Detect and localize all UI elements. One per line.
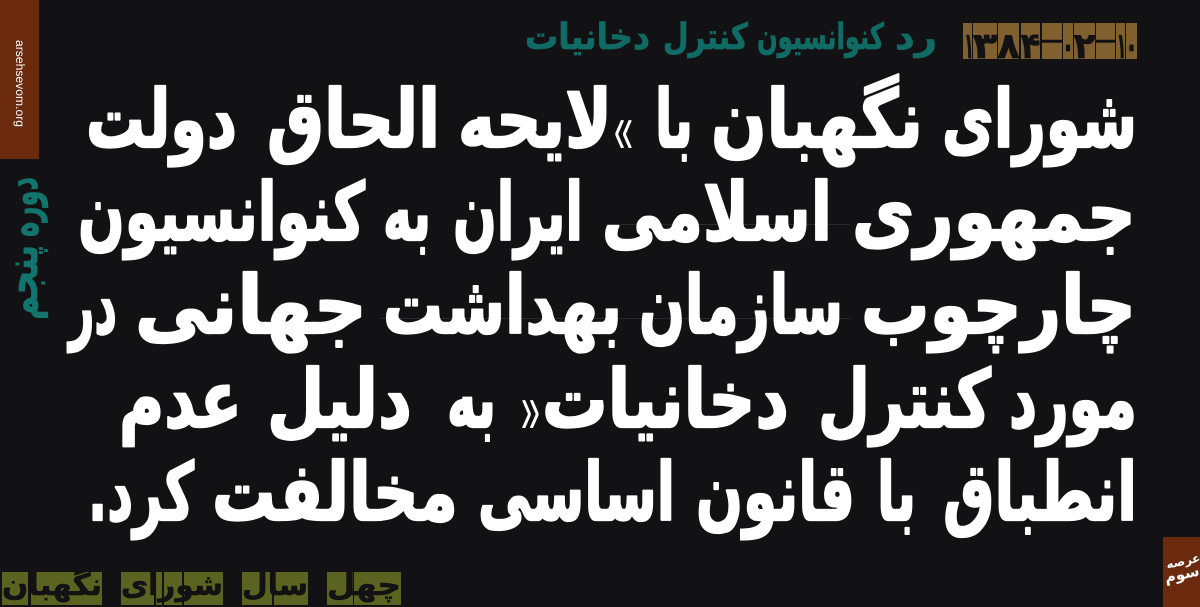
- line 1: با: [655, 73, 693, 166]
- line 2: [78, 166, 1136, 260]
- line 3: سازمان: [639, 259, 843, 353]
- line 2: ایران: [453, 166, 583, 260]
- series title: forty years of the Guardian Council: چهل: [327, 568, 401, 603]
- date badge: ۳: [972, 26, 998, 67]
- date badge: ۱: [964, 26, 974, 67]
- line 1: «: [614, 88, 633, 168]
- line 3: بهداشت: [383, 259, 622, 353]
- line 4: »: [521, 368, 540, 448]
- line 3: جهانی: [135, 259, 367, 353]
- series title: forty years of the Guardian Council: نگهبان: [2, 567, 102, 603]
- subheading: rejection of tobacco control convention: کنوانسیون: [757, 17, 884, 58]
- line 2: جمهوری: [852, 166, 1136, 260]
- subheading: rejection of tobacco control convention: [525, 17, 937, 58]
- date badge: ۴: [1020, 26, 1040, 67]
- line 5: کرد.: [88, 446, 194, 540]
- panel: website tab: [0, 0, 39, 159]
- line 5: با: [877, 446, 916, 539]
- series title: forty years of the Guardian Council: سال: [242, 568, 308, 603]
- line 4: دخانیات: [542, 353, 789, 446]
- line 5: مخالفت: [212, 446, 458, 539]
- line 5: اساسی: [478, 446, 675, 539]
- date badge: ۱: [1116, 26, 1126, 67]
- line 2: به: [383, 166, 431, 259]
- line 4: مورد: [1009, 353, 1137, 447]
- line 4: عدم: [119, 353, 242, 447]
- logo badge: [1163, 537, 1200, 607]
- date badge: ۸: [997, 26, 1020, 67]
- line 3: چارچوب: [861, 259, 1136, 353]
- line 1: نگهبان: [711, 73, 923, 167]
- panel: website tab: arsehsevom.org: [13, 40, 25, 127]
- main statement: [67, 73, 1137, 540]
- date badge: [963, 23, 1138, 67]
- line 3: [67, 259, 1136, 353]
- line 5: [88, 446, 1137, 540]
- subheading: rejection of tobacco control convention: کنترل: [663, 17, 748, 58]
- line 4: [119, 353, 1137, 448]
- subheading: rejection of tobacco control convention: دخانیات: [525, 17, 650, 58]
- line 1: الحاق: [267, 73, 440, 166]
- series title: forty years of the Guardian Council: شورای: [121, 568, 223, 603]
- line 4: دلیل: [267, 353, 412, 446]
- subheading: rejection of tobacco control convention: رد: [895, 17, 937, 58]
- line 1: لایحه: [458, 73, 612, 166]
- series title: forty years of the Guardian Council: [2, 567, 401, 605]
- line 2: کنوانسیون: [78, 166, 365, 260]
- date badge: ۰: [1124, 26, 1138, 67]
- date badge: ۰: [1061, 26, 1075, 67]
- line 4: به: [447, 353, 496, 446]
- logo badge: سوم: [1163, 562, 1200, 587]
- line 1: دولت: [86, 73, 237, 167]
- date badge: ۲: [1074, 26, 1096, 67]
- line 2: اسلامی: [602, 166, 832, 259]
- line 5: قانون: [696, 446, 855, 540]
- line 1: [86, 73, 1137, 168]
- line 4: کنترل: [818, 353, 991, 447]
- line 3: در: [67, 259, 117, 353]
